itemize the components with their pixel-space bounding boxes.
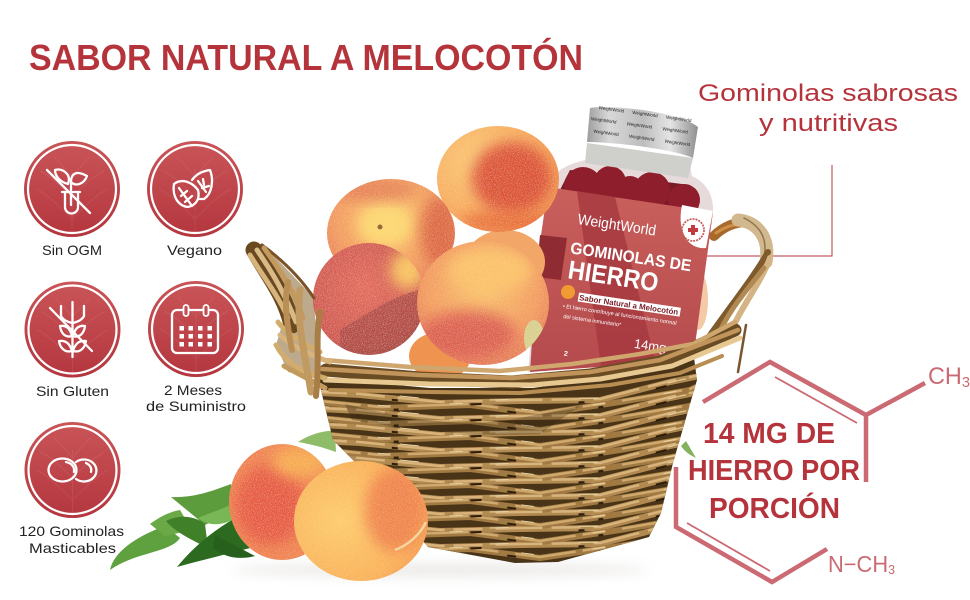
jar glass: [528, 150, 713, 372]
label dark stripe: [577, 191, 655, 366]
bottle brand and product text: • El hierro contribuye al funcionamiento normal: [562, 304, 677, 327]
icon badge: Sin OGM: [24, 141, 120, 258]
bottle brand and product text: [554, 211, 697, 374]
title: SABOR NATURAL A MELOCOTÓN: [29, 36, 583, 78]
icon badge: Vegano: [147, 141, 243, 258]
peach: behind centre: [465, 230, 545, 294]
product bottle: [528, 104, 713, 374]
silver cap: WeightWorld: [591, 116, 617, 125]
label: Sin OGM: [42, 242, 102, 258]
peach: top left: [327, 179, 455, 280]
wicker basket body: [320, 360, 697, 563]
silver cap: WeightWorld: [666, 115, 692, 123]
label: Sin Gluten: [36, 383, 109, 399]
peach: top right: [437, 126, 559, 232]
peach: bottom right: [294, 461, 428, 581]
icon badge: Sin Gluten: [24, 282, 120, 399]
molecule label: CH3: CH: [928, 363, 963, 390]
dosage callout: PORCIÓN: [709, 493, 840, 525]
peach: lower orange: [409, 332, 471, 380]
icon: calendar: [172, 305, 218, 353]
molecule diagram: [676, 362, 925, 582]
neck: [585, 143, 693, 178]
molecule label: CH3: 3: [962, 374, 970, 391]
left basket handle: [250, 245, 330, 396]
silver cap: WeightWorld: [664, 139, 691, 147]
subheading: y nutritivas: [759, 110, 898, 137]
dark weave band: [345, 404, 580, 435]
bottle brand and product text: GOMINOLAS DE: [569, 239, 692, 275]
label: Masticables: [29, 540, 116, 556]
subheading: Gominolas sabrosas: [698, 80, 958, 107]
gummies: [560, 166, 700, 216]
silver cap: WeightWorld: [626, 121, 653, 130]
label: [530, 187, 713, 372]
callout connector line: [703, 165, 832, 256]
bottle brand and product text: Sabor Natural a Melocotón: [579, 293, 679, 317]
icon badge: 2 Meses de Suministro: [146, 281, 246, 414]
silver cap: WeightWorld: [662, 126, 689, 135]
peach flavour icon: [561, 285, 575, 299]
icon: test tube with plant, crossed out: [47, 170, 90, 214]
molecule label: N-CH3: 3: [888, 562, 895, 577]
silver cap: WeightWorld: [593, 129, 620, 137]
label dark square: [536, 235, 567, 280]
icon: two leaves: [174, 170, 212, 207]
ground shadow: [230, 564, 650, 576]
silver cap: WeightWorld: [632, 110, 659, 118]
bottle brand and product text: 14mg: [633, 336, 667, 355]
peach: front centre: [417, 241, 549, 365]
silver cap: [587, 104, 698, 158]
silver cap: WeightWorld: [629, 134, 655, 142]
label: de Suministro: [146, 398, 246, 414]
peach: bottom left: [229, 444, 326, 560]
bottle brand and product text: 2: [563, 351, 568, 358]
pale peach behind jar: [688, 270, 708, 330]
icon badge: 120 Gominolas Masticables: [19, 422, 124, 556]
icon: two gummies: [48, 458, 96, 482]
molecule label: N-CH3: N−CH: [828, 551, 891, 577]
leaves: [110, 431, 696, 570]
bottle brand and product text: HIERRO: [566, 254, 661, 297]
label: Vegano: [167, 242, 222, 258]
certification seal: [681, 205, 713, 248]
dosage callout: 14 MG DE: [703, 418, 835, 450]
label: 120 Gominolas: [19, 523, 124, 539]
dosage callout: HIERRO POR: [688, 455, 860, 487]
peach: dark red: [313, 243, 422, 355]
label: 2 Meses: [164, 382, 222, 398]
bottle brand and product text: del sistema inmunitario*: [563, 314, 622, 329]
left handle bulk: [248, 243, 322, 380]
bottle brand and product text: WeightWorld: [577, 211, 657, 240]
icon: wheat ear, crossed out: [50, 302, 92, 357]
silver cap: WeightWorld: [598, 105, 625, 114]
right basket handle: [708, 218, 770, 372]
basket rim: [322, 322, 740, 393]
